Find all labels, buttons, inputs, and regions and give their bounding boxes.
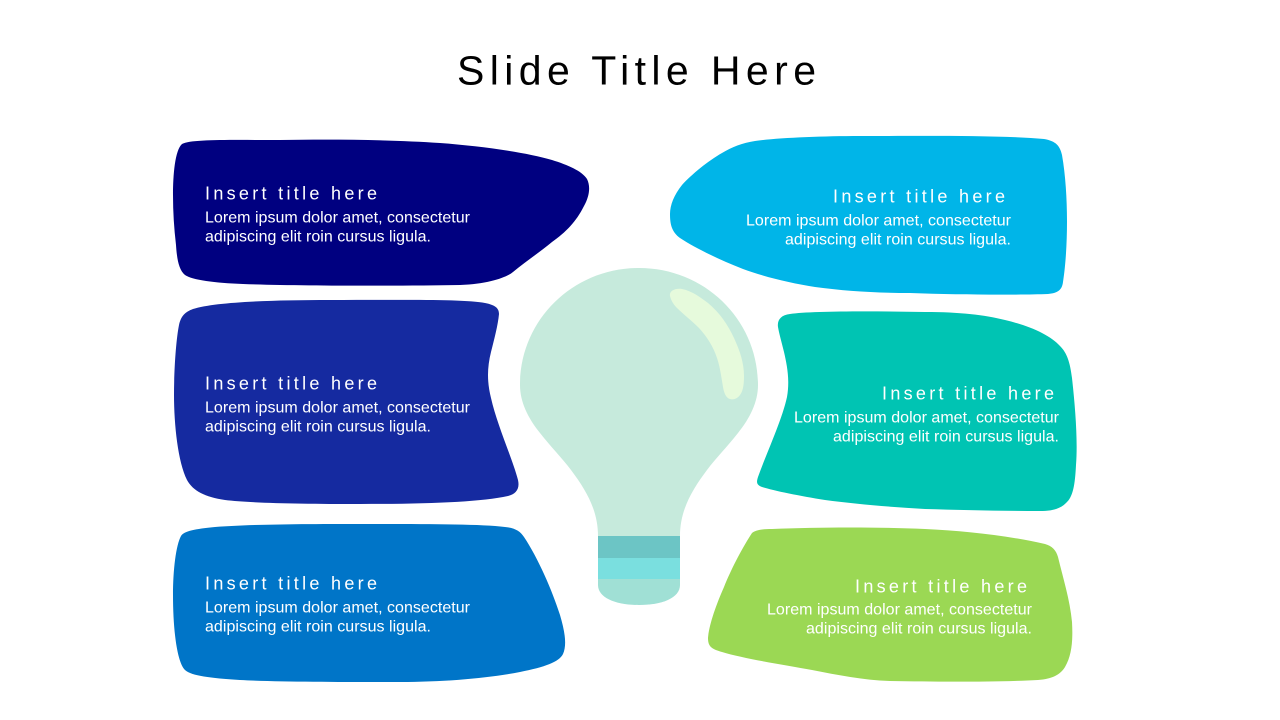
panel shape <box>173 524 565 682</box>
panel title: Insert title here <box>205 374 377 394</box>
panel shape <box>708 528 1072 682</box>
panel body: adipiscing elit roin cursus ligula. <box>205 418 431 436</box>
panel body: Lorem ipsum dolor amet, consectetur <box>205 400 471 416</box>
bulb glass <box>520 268 758 536</box>
panel: top left navy <box>173 140 589 286</box>
panel body <box>205 210 471 246</box>
panel shape <box>173 140 589 286</box>
panel title: Insert title here <box>205 574 377 594</box>
panel body: Lorem ipsum dolor amet, consectetur <box>767 602 1033 618</box>
panel: middle left indigo <box>174 300 519 504</box>
panel body: adipiscing elit roin cursus ligula. <box>833 428 1059 446</box>
panel body <box>746 212 1012 248</box>
panel body: adipiscing elit roin cursus ligula. <box>205 228 431 246</box>
panel: top right cyan <box>670 136 1067 295</box>
panel body: adipiscing elit roin cursus ligula. <box>205 618 431 636</box>
panel body <box>794 410 1060 446</box>
panel body <box>205 400 471 436</box>
panel body: Lorem ipsum dolor amet, consectetur <box>205 600 471 616</box>
bulb highlight <box>670 289 744 399</box>
panel: bottom right green <box>708 528 1072 682</box>
icon: light bulb <box>520 268 758 605</box>
panel body: adipiscing elit roin cursus ligula. <box>785 232 1011 248</box>
bulb base cap <box>598 579 680 605</box>
panel body <box>205 600 471 636</box>
title: Slide Title Here <box>457 48 816 94</box>
panel title: Insert title here <box>833 186 1005 206</box>
panel body: Lorem ipsum dolor amet, consectetur <box>205 210 471 226</box>
panel shape <box>757 311 1077 511</box>
panel body <box>767 602 1033 638</box>
panel: bottom left blue <box>173 524 565 682</box>
panel body: Lorem ipsum dolor amet, consectetur <box>746 212 1012 230</box>
panel shape <box>670 136 1067 295</box>
panel: middle right teal <box>757 311 1077 511</box>
panel title: Insert title here <box>205 184 377 204</box>
panel body: Lorem ipsum dolor amet, consectetur <box>794 410 1060 426</box>
panel body: adipiscing elit roin cursus ligula. <box>806 620 1032 638</box>
bulb base band dark <box>598 536 680 558</box>
panel title: Insert title here <box>855 576 1027 596</box>
panel title: Insert title here <box>882 384 1054 404</box>
bulb base band light <box>598 558 680 579</box>
panel shape <box>174 300 519 504</box>
